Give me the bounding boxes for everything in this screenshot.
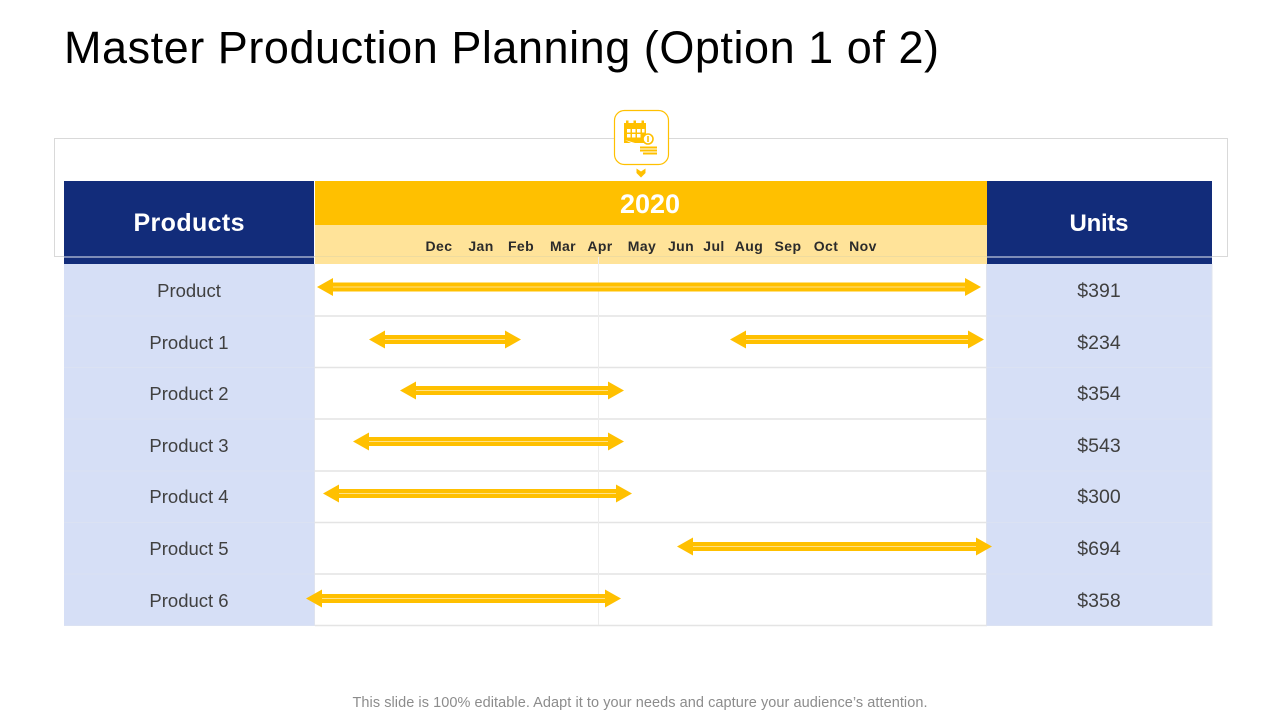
months header: Jun: [668, 238, 694, 254]
icon: calendar and coins badge: [614, 110, 668, 164]
units column: $358: [1077, 590, 1121, 612]
product names column: Product 6: [149, 590, 229, 611]
gantt arrow: Product 2: [400, 382, 624, 400]
title: Master Production Planning (Option 1 of 2): [64, 22, 939, 73]
months header: Nov: [849, 238, 877, 254]
product names column: [64, 264, 314, 626]
months header: Jul: [703, 238, 725, 254]
units column: $391: [1077, 280, 1121, 302]
months header: Oct: [814, 238, 838, 254]
months header: Jan: [468, 238, 494, 254]
units column: $543: [1077, 435, 1121, 457]
months header: Mar: [550, 238, 576, 254]
months header: Dec: [426, 238, 452, 254]
gantt arrow: Product: [317, 278, 981, 296]
gantt arrow: Product 1 second span: [730, 330, 984, 348]
gantt arrow: Product 6: [306, 590, 621, 608]
gantt arrow: Product 5: [677, 538, 992, 556]
months header: Aug: [735, 238, 763, 254]
product names column: Product 1: [149, 332, 229, 353]
units column: $694: [1077, 538, 1121, 560]
product names column: Product 5: [149, 538, 229, 559]
months header: Sep: [775, 238, 801, 254]
gantt arrow: Product 4: [323, 484, 632, 502]
footer note: This slide is 100% editable. Adapt it to your needs and capture your audience’s attention.: [352, 695, 928, 711]
year header: 2020: [620, 189, 680, 219]
units column: $234: [1077, 332, 1121, 354]
months header: [315, 225, 987, 264]
units column: [987, 264, 1212, 626]
months header: Feb: [508, 238, 534, 254]
year header: [315, 181, 987, 225]
product names column: Product 2: [149, 383, 229, 404]
product names column: Product: [157, 280, 221, 301]
months header: Apr: [587, 238, 613, 254]
frame panel behind table header: [54, 138, 1228, 256]
units column: $354: [1077, 383, 1121, 405]
units column: $300: [1077, 486, 1121, 508]
units header: [987, 181, 1212, 264]
products header: [64, 181, 314, 264]
units header: Units: [1070, 210, 1128, 237]
product names column: Product 3: [149, 435, 229, 456]
gantt arrow: Product 3: [353, 432, 624, 450]
icon: chevron pointing down: [636, 168, 646, 178]
products header: Products: [134, 209, 244, 237]
months header: May: [628, 238, 656, 254]
gantt arrow: Product 1 first span: [369, 330, 521, 348]
product names column: Product 4: [149, 486, 229, 507]
